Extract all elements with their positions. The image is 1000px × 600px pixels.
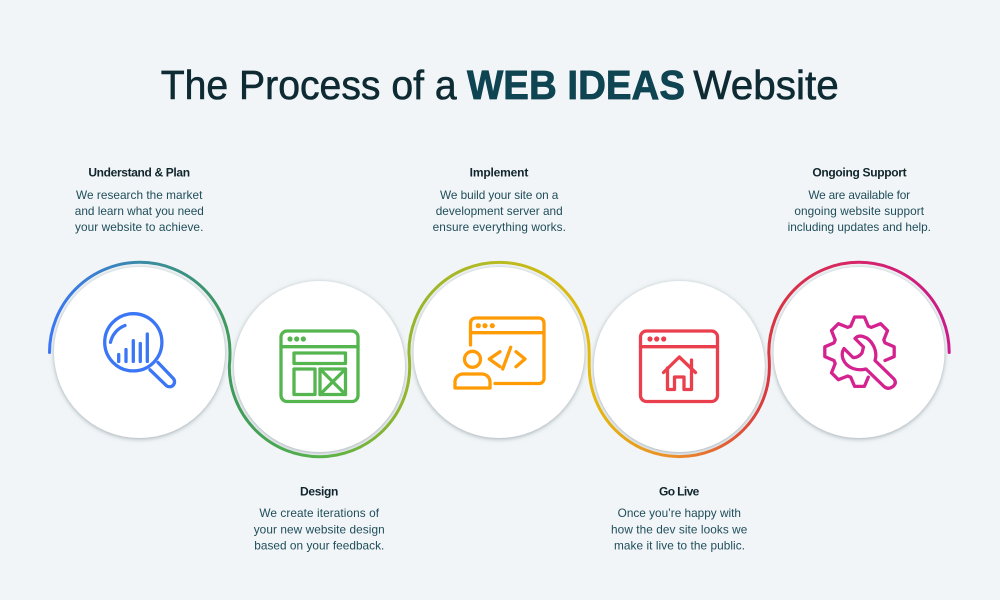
text: understand and plan description: and learn what you need: [75, 204, 204, 218]
heading: go live: Go Live: [659, 485, 700, 499]
text: implement description: We build your site on a: [440, 188, 559, 202]
icon: green wireframe window: [281, 331, 358, 402]
text: design description: your new website design: [254, 522, 385, 536]
text: ongoing support description: including updates and help.: [788, 220, 931, 234]
gradient connecting arc: [50, 262, 949, 457]
text: understand and plan description: [75, 188, 204, 234]
text: ongoing support description: We are available for: [808, 188, 910, 202]
text: ongoing support description: [788, 188, 931, 234]
heading: implement: Implement: [470, 166, 528, 180]
step 2: design: [254, 485, 385, 552]
text: implement description: ensure everything works.: [433, 220, 566, 234]
text: design description: based on your feedback.: [254, 538, 384, 552]
text: ongoing support description: ongoing website support: [794, 204, 925, 218]
heading: understand and plan: Understand & Plan: [88, 166, 190, 180]
text: implement description: development server and: [436, 204, 563, 218]
icon: developer with code window: [455, 318, 544, 388]
step 1: understand and plan: [75, 166, 204, 234]
title: [161, 62, 839, 108]
text: implement description: [433, 188, 566, 234]
heading: ongoing support: Ongoing Support: [812, 166, 907, 180]
text: design description: We create iterations of: [259, 506, 380, 520]
text: design description: [254, 506, 385, 552]
heading: design: Design: [300, 485, 338, 499]
icon: gear with wrench: [825, 317, 895, 388]
icon: magnifying glass with bar chart: [105, 314, 175, 387]
step 3: implement: [433, 166, 566, 234]
text: understand and plan description: We research the market: [76, 188, 203, 202]
icon: house in window: [640, 331, 718, 402]
text: go live description: [611, 506, 748, 552]
title: The Process of a: [161, 62, 457, 108]
text: understand and plan description: your website to achieve.: [75, 220, 203, 234]
text: go live description: make it live to the public.: [614, 538, 745, 552]
step 4: go live: [611, 485, 748, 552]
text: go live description: Once you’re happy with: [618, 506, 741, 520]
text: go live description: how the dev site looks we: [611, 522, 748, 536]
title: Website: [693, 62, 839, 108]
step 5: ongoing support: [788, 166, 931, 234]
title: WEB IDEAS: [467, 62, 685, 108]
white circles row: [54, 267, 944, 452]
